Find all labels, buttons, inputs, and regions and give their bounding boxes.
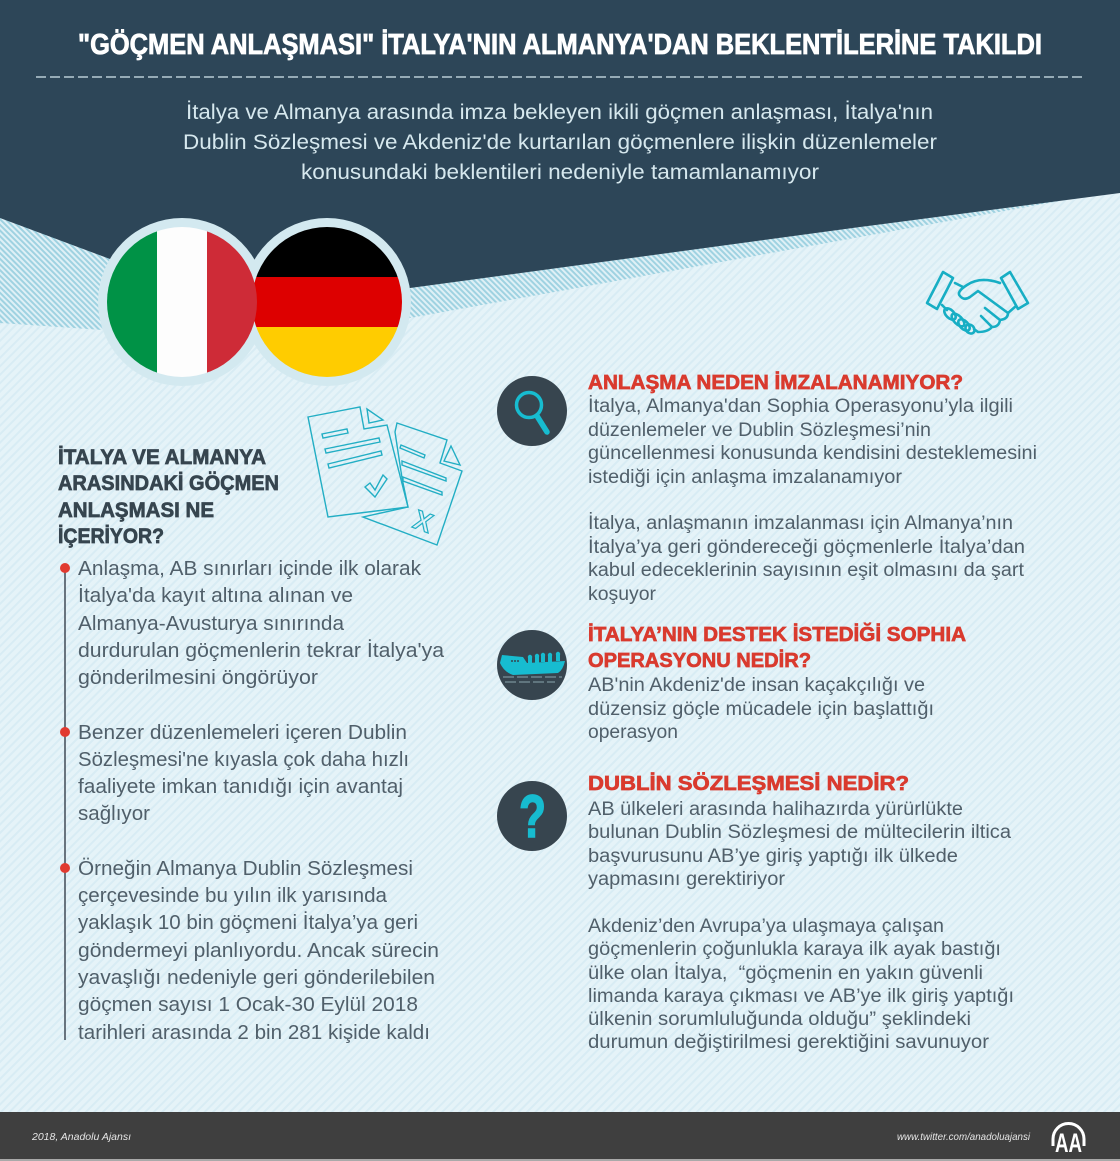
section: Sophia: AB'nin Akdeniz'de insan kaçakçılığı ve <box>588 675 925 696</box>
section: why not signed: İtalya, Almanya'dan Sophia Operasyonu’yla ilgili <box>588 396 1013 417</box>
twitter url: www.twitter.com/anadoluajansi <box>897 1131 1031 1143</box>
section: Dublin: yapmasını gerektiriyor <box>588 869 786 890</box>
section: why not signed: İtalya, anlaşmanın imzalanması için Almanya’nın <box>588 513 1013 534</box>
section: Dublin: DUBLİN SÖZLEŞMESİ NEDİR? <box>588 772 909 795</box>
left text: item 2 <box>78 721 409 825</box>
left text: item 1: Almanya-Avusturya sınırında <box>78 612 345 635</box>
icon: question mark: ? <box>519 783 546 850</box>
credit: 2018, Anadolu Ajansı <box>31 1131 131 1143</box>
section: Dublin: bulunan Dublin Sözleşmesi de mültecilerin iltica <box>588 822 1011 843</box>
section: Sophia: İTALYA’NIN DESTEK İSTEDİĞİ SOPHIA <box>588 622 966 646</box>
section: Sophia: operasyon <box>588 722 678 743</box>
section: Sophia: düzensiz göçle mücadele için başlattığı <box>588 699 934 720</box>
left text: item 3: göndermeyi planlıyordu. Ancak sürecin <box>78 939 439 962</box>
section: why not signed <box>588 371 1037 605</box>
section: Dublin: durumun değiştirilmesi gerektiğini savunuyor <box>588 1032 990 1053</box>
section: why not signed: düzenlemeler ve Dublin Sözleşmesi’nin <box>588 420 931 441</box>
left text: item 1: durdurulan göçmenlerin tekrar İtalya'ya <box>78 639 445 662</box>
section: why not signed: istediği için anlaşma imzalanamıyor <box>588 467 903 488</box>
section: Dublin: Akdeniz’den Avrupa’ya ulaşmaya çalışan <box>588 916 944 937</box>
left text: item 1: Anlaşma, AB sınırları içinde ilk olarak <box>78 557 422 580</box>
icon: documents <box>308 407 462 545</box>
intro text: İtalya ve Almanya arasında imza bekleyen ikili göçmen anlaşması, İtalya'nın <box>186 101 933 124</box>
left text: item 3: Örneğin Almanya Dublin Sözleşmesi <box>78 857 413 880</box>
left text: item 3: göçmen sayısı 1 Ocak-30 Eylül 2018 <box>78 993 418 1016</box>
section: Sophia <box>588 622 966 743</box>
intro text: Dublin Sözleşmesi ve Akdeniz'de kurtarılan göçmenlere ilişkin düzenlemeler <box>183 131 937 154</box>
left text: item 3: tarihleri arasında 2 bin 281 kişide kaldı <box>78 1021 430 1044</box>
left text: item 1: İtalya'da kayıt altına alınan ve <box>78 584 353 607</box>
left heading <box>58 446 279 548</box>
icon: magnifier <box>497 376 567 446</box>
logo: AA: AA <box>1055 1128 1082 1158</box>
left text: item 1 <box>78 557 445 689</box>
timeline <box>60 563 70 1040</box>
header panel <box>0 0 1120 290</box>
flag: Germany <box>252 227 402 377</box>
left text: item 2: sağlıyor <box>78 802 150 825</box>
section: why not signed: güncellenmesi konusunda kendisini desteklemesini <box>588 443 1037 464</box>
left text: item 3 <box>78 857 439 1044</box>
left heading: İÇERİYOR? <box>58 525 164 548</box>
icon: question mark <box>497 781 567 851</box>
section: Dublin: göçmenlerin çoğunlukla karaya ilk ayak bastığı <box>588 939 1001 960</box>
left text: item 3: yaklaşık 10 bin göçmeni İtalya’ya geri <box>78 911 418 934</box>
section: why not signed: İtalya’ya geri göndereceği göçmenlerle İtalya’dan <box>588 537 1025 558</box>
left text: item 3: yavaşlığı nedeniyle geri gönderilebilen <box>78 966 435 989</box>
flags <box>98 218 411 386</box>
footer <box>0 1112 1120 1161</box>
left heading: ARASINDAKİ GÖÇMEN <box>58 472 279 495</box>
left heading: İTALYA VE ALMANYA <box>58 446 266 469</box>
intro text: konusundaki beklentileri nedeniyle tamamlanamıyor <box>301 161 819 184</box>
flag: Italy <box>107 227 257 377</box>
left text: item 2: faaliyete imkan tanıdığı için avantaj <box>78 775 403 798</box>
section: Dublin: limanda karaya çıkması ve AB’ye ilk giriş yaptığı <box>588 986 1014 1007</box>
hatched band <box>0 190 1060 340</box>
left text: item 3: çerçevesinde bu yılın ilk yarısında <box>78 884 388 907</box>
left text: item 1: gönderilmesini öngörüyor <box>78 666 318 689</box>
left text: item 2: Benzer düzenlemeleri içeren Dublin <box>78 721 407 744</box>
icon: migrant boat <box>497 630 567 700</box>
icon: documents: X <box>409 504 437 539</box>
section: why not signed: koşuyor <box>588 584 657 605</box>
section: Dublin: ülkenin sorumluluğunda olduğu” şeklindeki <box>588 1009 971 1030</box>
section: Dublin: AB ülkeleri arasında halihazırda yürürlükte <box>588 799 963 820</box>
section: why not signed: ANLAŞMA NEDEN İMZALANAMIYOR? <box>588 371 963 394</box>
icon: handshake <box>927 272 1028 335</box>
section: Dublin: ülke olan İtalya, “göçmenin en yakın güvenli <box>588 963 983 984</box>
section: why not signed: kabul edeceklerinin sayısının eşit olmasını da şart <box>588 560 1025 581</box>
section: Dublin: başvurusunu AB’ye giriş yaptığı ilk ülkede <box>588 846 958 867</box>
section: Dublin <box>588 772 1014 1053</box>
left text: item 2: Sözleşmesi'ne kıyasla çok daha hızlı <box>78 748 409 771</box>
intro text <box>183 101 937 184</box>
logo: AA <box>1053 1124 1084 1158</box>
left heading: ANLAŞMASI NE <box>58 499 214 522</box>
section: Sophia: OPERASYONU NEDİR? <box>588 649 811 672</box>
